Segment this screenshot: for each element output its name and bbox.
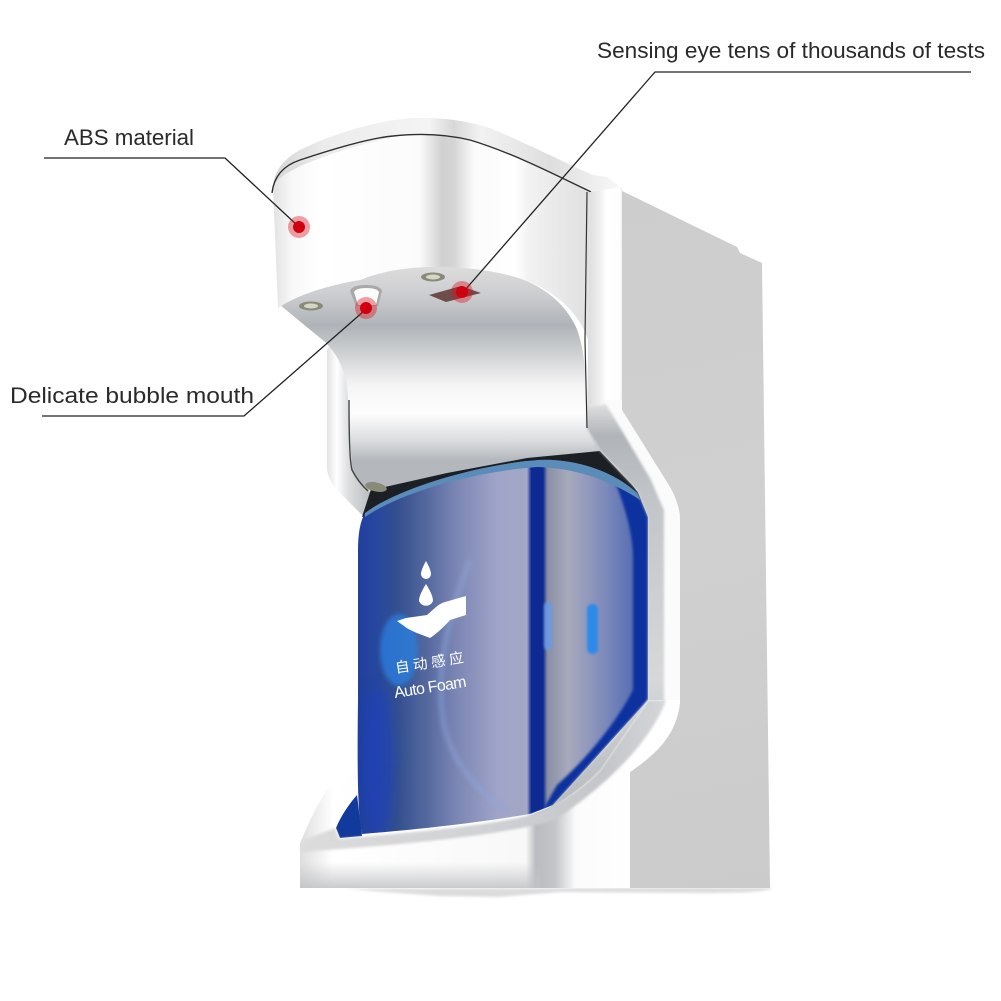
lower sensor [364,480,388,494]
label: Sensing eye tens of thousands of tests [597,38,985,63]
callout: sensing eye [451,38,985,303]
leader line [465,72,971,290]
callout: delicate bubble mouth [10,297,377,416]
top cap [273,118,622,193]
tray rim band [300,700,666,852]
leader line [44,158,298,226]
stripe redrawn over deep blue [531,809,543,814]
pale arc reflection [437,560,494,804]
blue slash near stripe [544,602,552,650]
left arm frame [327,345,385,520]
blue glow left [380,614,418,686]
soap bottle [358,460,648,834]
rear sensor [421,272,445,282]
frame white outer band [600,400,680,792]
floor shadow [345,888,772,897]
lower drop [419,584,433,606]
bottle body [358,460,642,834]
seam along frame [585,192,587,428]
leader line [42,311,364,416]
marker dot [451,281,473,303]
upper drop [421,561,431,579]
teal top rim [365,460,640,517]
frame grey ribbon [553,404,664,805]
deep blue right edge [543,476,648,809]
dispenser product photo illustration [272,118,772,897]
vertical frame [553,187,680,805]
marker dot [288,216,310,238]
dark cavity behind bottle [362,449,648,517]
tray inner blue lip [336,795,362,838]
base lower silver shade [300,862,540,888]
bottle english label: Auto Foam [393,674,468,702]
blue vertical glow [362,685,394,835]
label: ABS material [64,125,194,150]
sensing eye window [429,286,481,302]
blue slash right [587,604,598,654]
label: Delicate bubble mouth [10,383,254,408]
left sensor [299,302,323,310]
head front [273,135,590,340]
hand and drops logo [397,561,466,638]
bubble mouth nozzle [350,285,382,306]
callout: ABS material [44,125,310,238]
side panel [620,190,770,888]
bottle chinese label: 自动感应 [393,646,465,678]
marker dot [355,297,377,319]
seam line [272,134,591,193]
neck underside [280,267,600,491]
base tray [300,700,680,888]
sensors and nozzle [299,272,481,494]
hand [397,596,466,638]
lower left neck shadow [349,400,368,491]
